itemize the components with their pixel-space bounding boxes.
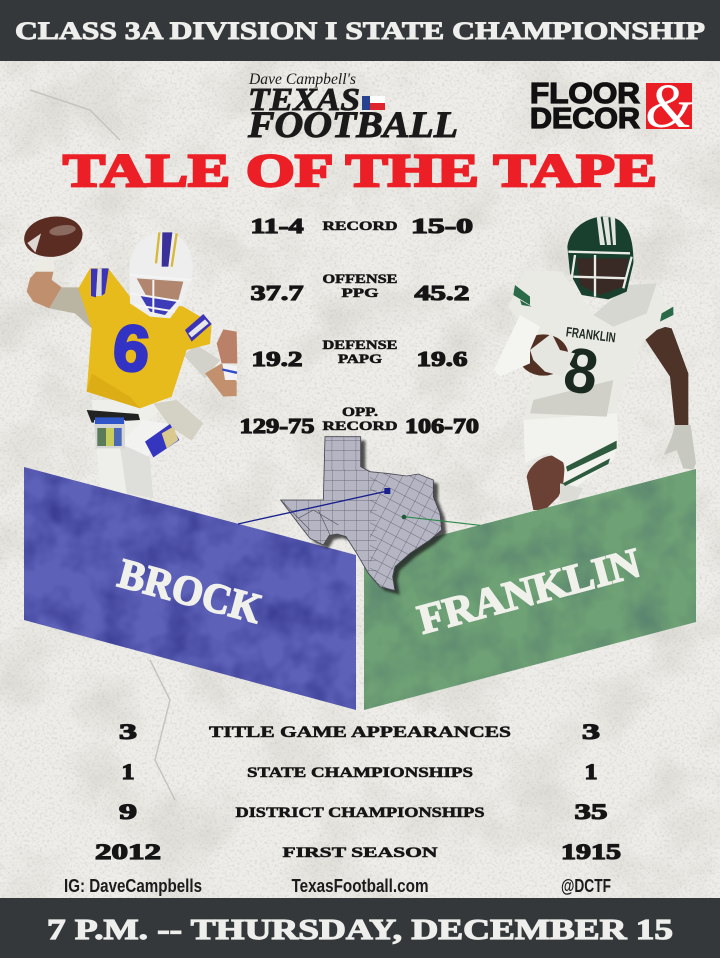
stat row: record: 11-4 — [250, 214, 304, 238]
title: TALE OF THE TAPE — [63, 145, 657, 197]
comparison row: state championships: STATE CHAMPIONSHIPS — [247, 765, 473, 781]
far arm — [643, 325, 688, 427]
yellow jersey — [78, 268, 212, 408]
team name: FRANKLIN — [565, 324, 617, 345]
comparison row: state championships — [122, 759, 598, 784]
social handles: IG: DaveCampbells — [64, 876, 202, 896]
number 6: 6 — [110, 310, 153, 386]
logo: Floor and Decor: FLOOR — [530, 78, 640, 110]
stat row: defense papg: DEFENSE — [322, 337, 398, 352]
comparison row: district championships: 9 — [119, 799, 137, 824]
logo: Floor and Decor: DECOR — [530, 103, 640, 135]
white jersey — [508, 270, 675, 420]
comparison row: first season: FIRST SEASON — [282, 845, 438, 861]
stat row: offense ppg — [250, 271, 470, 305]
shorts — [523, 407, 618, 487]
leg — [527, 455, 564, 510]
helmet — [567, 217, 633, 299]
comparison row: state championships: 1 — [122, 759, 134, 784]
comparison row: first season: 1915 — [561, 839, 621, 864]
icon: Texas flag — [362, 96, 385, 110]
panel: Brock — [24, 467, 356, 710]
stat row: opponent record: OPP. — [342, 404, 378, 419]
football — [22, 213, 85, 261]
comparison row: district championships — [119, 799, 608, 824]
comparison row: district championships: 35 — [574, 799, 608, 824]
stat row: defense papg: PAPG — [338, 351, 382, 366]
comparison row: title game appearances: 3 — [119, 719, 137, 744]
stat row: defense papg: 19.2 — [252, 347, 302, 371]
marker lines — [238, 491, 387, 524]
panel: Franklin — [364, 469, 696, 710]
social handles: @DCTF — [561, 876, 611, 896]
stat row: record: 15-0 — [411, 214, 473, 238]
stat row: offense ppg: 37.7 — [250, 281, 304, 305]
logo: Dave Campbell's Texas Football: TEXAS — [248, 81, 360, 117]
logo: Floor and Decor — [530, 73, 693, 141]
football — [518, 334, 568, 376]
far arm — [183, 345, 220, 378]
logo: Dave Campbell's Texas Football: Dave Campbell's — [248, 71, 356, 88]
top banner: CLASS 3A DIVISION I STATE CHAMPIONSHIP — [15, 18, 705, 45]
comparison row: title game appearances: 3 — [582, 719, 600, 744]
top banner — [0, 0, 720, 61]
number 8: 8 — [560, 335, 602, 409]
raised arm — [27, 272, 62, 308]
legs and pants — [92, 400, 172, 493]
comparison row: first season — [95, 839, 621, 864]
stat row: record — [250, 214, 473, 238]
comparison row: title game appearances: TITLE GAME APPEARANCES — [209, 724, 511, 741]
stat row: defense papg: 19.6 — [416, 347, 468, 371]
near arm — [494, 315, 540, 377]
stat row: record: RECORD — [322, 218, 398, 233]
stat row: opponent record — [240, 404, 479, 438]
logo: Dave Campbell's Texas Football: FOOTBALL — [247, 105, 458, 146]
bottom banner — [0, 898, 720, 958]
logo: Floor and Decor: & — [645, 73, 693, 141]
comparison row: title game appearances — [119, 719, 600, 744]
social handles — [64, 876, 611, 896]
stat row: offense ppg: OFFENSE — [322, 271, 398, 286]
stat row: opponent record: 106-70 — [405, 414, 479, 438]
helmet — [129, 232, 193, 318]
stat row: offense ppg: 45.2 — [414, 281, 470, 305]
social handles: TexasFootball.com — [292, 876, 428, 896]
comparison row: district championships: DISTRICT CHAMPIONSHIPS — [236, 805, 484, 821]
stat row: offense ppg: PPG — [342, 285, 378, 300]
logo: Dave Campbell's Texas Football — [247, 71, 458, 146]
player: Franklin running back — [494, 217, 696, 510]
team name: Franklin: FRANKLIN — [413, 540, 645, 644]
stat row: defense papg — [252, 337, 468, 371]
stat row: opponent record: 129-75 — [240, 414, 314, 438]
gray sleeve — [49, 287, 92, 328]
stat row: opponent record: RECORD — [322, 418, 398, 433]
comparison row: first season: 2012 — [95, 839, 161, 864]
map: Texas with county lines — [238, 437, 480, 595]
comparison row: state championships: 1 — [584, 759, 598, 784]
player: Brock quarterback — [22, 213, 237, 498]
bottom banner: 7 P.M. -- THURSDAY, DECEMBER 15 — [47, 914, 673, 946]
team name: Brock: BROCK — [113, 551, 267, 633]
